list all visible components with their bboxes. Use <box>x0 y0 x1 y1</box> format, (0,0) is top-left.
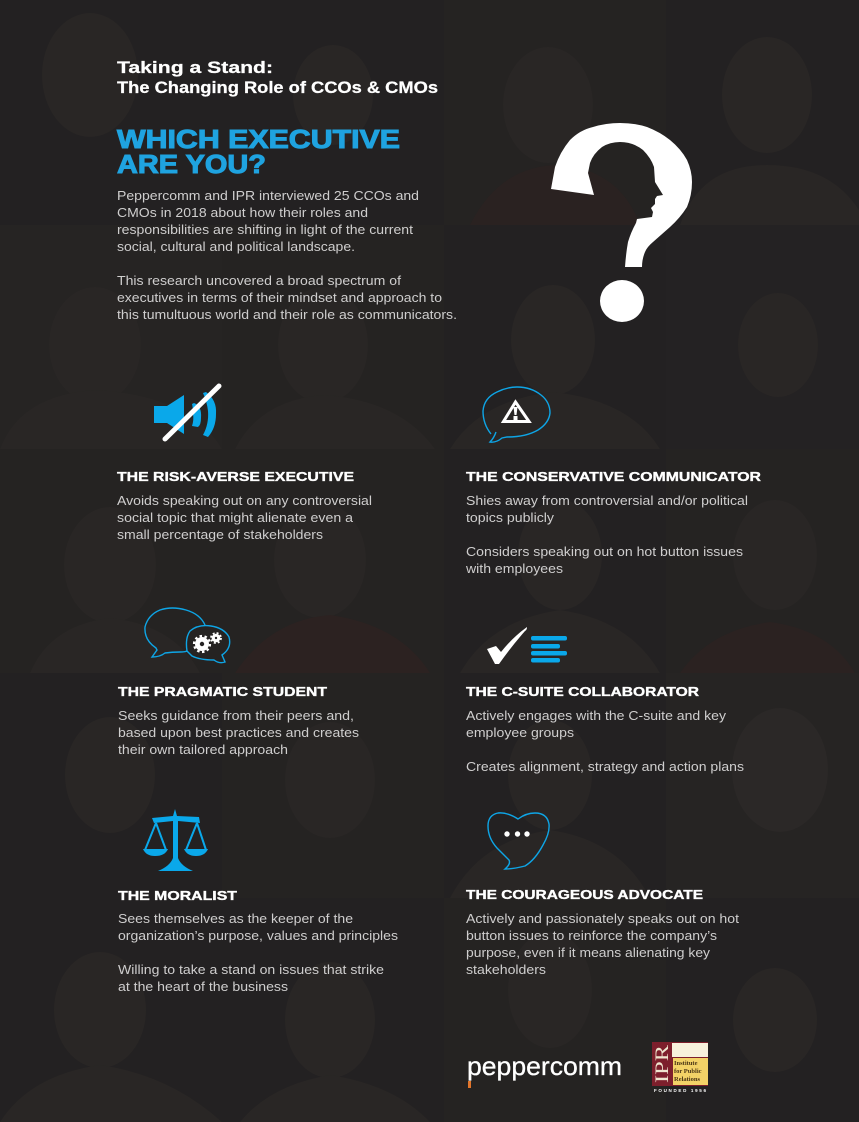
logo: institute for public relations: Institute <box>674 1060 698 1067</box>
title: Taking a Stand: <box>117 59 273 77</box>
section: the pragmatic student: THE PRAGMATIC STUDENT <box>118 684 327 699</box>
section: the courageous advocate: button issues to reinforce the company’s <box>466 928 718 943</box>
section: the pragmatic student <box>118 684 360 757</box>
intro text: This research uncovered a broad spectrum of <box>117 273 401 288</box>
section: the courageous advocate: stakeholders <box>466 962 547 977</box>
intro text: responsibilities are shifting in light of the current <box>117 222 413 237</box>
section: the moralist: THE MORALIST <box>118 888 237 903</box>
logo: institute for public relations: for Public <box>674 1068 702 1075</box>
section: the conservative communicator <box>465 469 762 576</box>
logo: institute for public relations: IPR <box>652 1045 673 1083</box>
logo: peppercomm: peppercomm <box>467 1051 622 1081</box>
intro text: executives in terms of their mindset and approach to <box>117 290 442 305</box>
section: the c-suite collaborator <box>466 684 745 774</box>
section: the moralist: organization’s purpose, values and principles <box>118 928 399 943</box>
logo: institute for public relations: FOUNDED 1956 <box>654 1088 706 1093</box>
intro text: social, cultural and political landscape. <box>117 239 355 254</box>
heading: ARE YOU? <box>117 151 266 179</box>
heading <box>117 126 400 179</box>
section: the c-suite collaborator: THE C-SUITE COLLABORATOR <box>466 684 700 699</box>
section: the moralist <box>118 888 399 994</box>
section: the risk-averse executive: THE RISK-AVERSE EXECUTIVE <box>117 469 354 484</box>
section: the courageous advocate: purpose, even if it means alienating key <box>466 945 711 960</box>
icon: chat bubbles with gears <box>145 608 230 663</box>
intro text: CMOs in 2018 about how their roles and <box>117 205 368 220</box>
section: the risk-averse executive: small percentage of stakeholders <box>117 527 324 542</box>
section: the conservative communicator: Considers speaking out on hot button issues <box>466 544 744 559</box>
section: the pragmatic student: their own tailored approach <box>118 742 288 757</box>
section: the risk-averse executive: Avoids speaking out on any controversial <box>117 493 372 508</box>
section: the risk-averse executive <box>117 469 372 542</box>
section: the moralist: at the heart of the business <box>118 979 289 994</box>
icon: scales of justice <box>143 809 208 871</box>
section: the courageous advocate: THE COURAGEOUS ADVOCATE <box>466 887 703 902</box>
intro text <box>117 188 457 322</box>
section: the risk-averse executive: social topic that might alienate even a <box>117 510 354 525</box>
section: the conservative communicator: THE CONSERVATIVE COMMUNICATOR <box>466 469 762 484</box>
icon: heart speech bubble <box>488 813 549 869</box>
section: the moralist: Sees themselves as the keeper of the <box>118 911 353 926</box>
section: the c-suite collaborator: Actively engages with the C-suite and key <box>466 708 727 723</box>
logo: institute for public relations: Relations <box>674 1076 700 1083</box>
section: the pragmatic student: based upon best practices and creates <box>118 725 360 740</box>
section: the conservative communicator: Shies away from controversial and/or political <box>466 493 748 508</box>
section: the moralist: Willing to take a stand on issues that strike <box>118 962 384 977</box>
section: the c-suite collaborator: Creates alignment, strategy and action plans <box>466 759 745 774</box>
icon: check mark and list <box>487 627 567 664</box>
intro text: this tumultuous world and their role as communicators. <box>117 307 457 322</box>
section: the conservative communicator: with employees <box>465 561 564 576</box>
icon: warning speech bubble <box>483 387 550 442</box>
section: the conservative communicator: topics publicly <box>466 510 555 525</box>
section: the courageous advocate <box>466 887 739 977</box>
section: the pragmatic student: Seeks guidance from their peers and, <box>118 708 354 723</box>
intro text: Peppercomm and IPR interviewed 25 CCOs and <box>117 188 419 203</box>
heading: WHICH EXECUTIVE <box>117 126 400 154</box>
icon: question mark with head silhouette <box>551 123 692 322</box>
section: the c-suite collaborator: employee groups <box>466 725 575 740</box>
section: the courageous advocate: Actively and passionately speaks out on hot <box>466 911 739 926</box>
icon: muted speaker <box>154 386 219 439</box>
title: The Changing Role of CCOs & CMOs <box>117 79 438 97</box>
title <box>117 59 438 97</box>
logo: institute for public relations <box>652 1042 708 1093</box>
